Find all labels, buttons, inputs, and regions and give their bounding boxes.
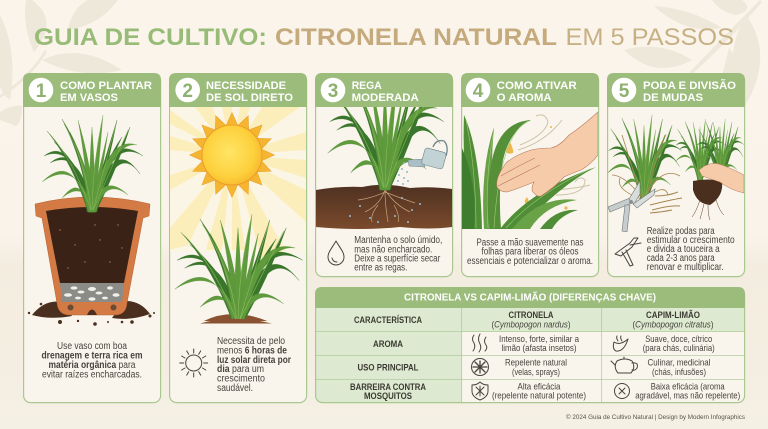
row: barreira contra mosquitos: (repelente natural potente): [492, 391, 586, 401]
table title: [315, 287, 745, 308]
header: step 2: NECESSIDADE: [206, 80, 286, 92]
text: step 4 description: Passe a mão suavemente nas: [476, 237, 584, 248]
decorative leaves right: [624, 0, 762, 106]
row: uso principal: USO PRINCIPAL: [358, 362, 419, 372]
text: step 3 description: mas não encharcado.: [354, 244, 432, 255]
text: step 2 description: dia para um: [217, 364, 264, 375]
text: step 4 description: essenciais e potencializar o aroma.: [467, 256, 593, 267]
header: step 5: DE MUDAS: [643, 92, 703, 104]
row: barreira contra mosquitos: [350, 382, 740, 401]
row: barreira contra mosquitos: Alta eficácia: [518, 382, 561, 392]
decorative leaves left: [0, 0, 122, 126]
text: step 4 description: folhas para liberar os óleos: [482, 247, 579, 258]
row: uso principal: [358, 357, 710, 377]
row: aroma: Intenso, forte, similar a: [499, 334, 580, 344]
row: barreira contra mosquitos: agradável, mas não repelente): [635, 391, 740, 401]
header: step 1: [23, 73, 161, 107]
text: step 1 description: matéria orgânica para: [48, 360, 136, 371]
header: step 4: COMO ATIVAR: [497, 80, 577, 92]
panel: step 1 como plantar em vasos: [23, 73, 161, 403]
header: step 3: MODERADA: [352, 92, 419, 104]
header: step 4: 4: [473, 81, 484, 102]
title: GUIA DE CULTIVO:: [34, 24, 267, 51]
icon: x in circle: [614, 384, 630, 398]
table cell shading: [316, 308, 462, 403]
table column headers: CARACTERÍSTICA: [354, 315, 422, 325]
icon: shield mosquito: [472, 382, 488, 400]
pruning shears: [608, 181, 655, 232]
panel: step 5 poda e divisao de mudas: [607, 73, 745, 277]
header: step 2: [169, 73, 307, 107]
text: step 5 description: e divida a touceira a: [647, 244, 720, 255]
header: step 5: PODA E DIVISÃO: [643, 79, 736, 92]
text: step 5 description: [647, 226, 735, 273]
panel: step 3 rega moderada: [315, 72, 453, 277]
text: step 3 description: [354, 235, 442, 274]
icon: shears outline: [615, 238, 641, 266]
ground mound: [200, 319, 272, 324]
icon: teapot: [611, 357, 637, 373]
text: step 1 description: evitar raízes encharcadas.: [42, 370, 142, 380]
text: step 5 description: cada 2-3 anos para: [647, 253, 715, 264]
footer credit: © 2024 Guia de Cultivo Natural | Design by Modern Infographics: [566, 414, 745, 421]
text: step 3 description: entre as regas.: [354, 263, 407, 274]
illustration: potted plant: [28, 115, 155, 326]
row: uso principal: Culinar, medicinal: [648, 358, 710, 368]
row: aroma: AROMA: [373, 339, 403, 349]
header: step 3: REGA: [352, 80, 382, 92]
row: aroma: Suave, doce, cítrico: [645, 334, 712, 344]
text: step 2 description: saudável.: [217, 383, 253, 394]
text: step 1 description: drenagem e terra rica em: [42, 350, 143, 362]
title: [34, 24, 734, 51]
header: step 3: [315, 73, 453, 107]
header: step 4: O AROMA: [497, 92, 552, 104]
title: EM 5 PASSOS: [566, 24, 734, 51]
text: step 1 description: Use vaso com boa: [57, 341, 128, 352]
row: barreira contra mosquitos: MOSQUITOS: [364, 391, 412, 401]
text: step 5 description: estimular o crescimento: [647, 235, 735, 246]
table column headers: [354, 310, 714, 330]
row: uso principal: (velas, sprays): [512, 367, 560, 377]
icon: aroma waves: [472, 334, 487, 352]
icon: water drop: [328, 241, 344, 265]
text: step 5 description: renovar e multiplicar.: [647, 262, 724, 273]
header: step 5: 5: [619, 81, 630, 102]
icon: watering can: [397, 141, 447, 185]
panel: comparison table: [315, 287, 745, 403]
row: uso principal: Repelente natural: [505, 358, 567, 368]
row: aroma: limão (afasta insetos): [502, 343, 576, 353]
text: step 2 description: luz solar direta por: [217, 355, 291, 366]
text: step 5 description: Realize podas para: [647, 226, 715, 237]
text: step 2 description: crescimento: [217, 374, 265, 385]
icon: mosquito in circle: [472, 358, 488, 376]
row: barreira contra mosquitos: BARREIRA CONTRA: [350, 382, 426, 392]
text: step 2 description: [217, 336, 291, 394]
header: step 2: DE SOL DIRETO: [206, 92, 293, 104]
table title: CITRONELA VS CAPIM-LIMÃO (DIFERENÇAS CHAVE): [404, 290, 656, 304]
header: step 3: 3: [328, 81, 338, 102]
table column headers: (Cymbopogon citratus): [632, 320, 714, 330]
table column headers: CAPIM-LIMÃO: [646, 310, 700, 320]
illustration: watered plant: [316, 107, 452, 229]
row: uso principal: (chás, infusões): [652, 367, 706, 377]
header: step 4: [461, 73, 599, 107]
illustration: sun and plant: [170, 95, 306, 324]
table column headers: CITRONELA: [508, 310, 554, 320]
icon: spoon and steam: [613, 336, 628, 351]
header: step 2: 2: [182, 81, 193, 102]
panel: step 2 necessidade de sol direto: [169, 73, 307, 403]
text: step 2 description: Necessita de pelo: [217, 336, 285, 347]
text: step 3 description: Mantenha o solo úmido,: [354, 235, 442, 246]
row: aroma: [373, 334, 715, 353]
row: barreira contra mosquitos: Baixa eficácia (aroma: [651, 382, 725, 392]
title: CITRONELA NATURAL: [275, 24, 557, 51]
illustration: pruning and division: [607, 115, 744, 232]
header: step 1: EM VASOS: [60, 92, 118, 104]
header: step 1: 1: [36, 81, 47, 102]
table column headers: (Cymbopogon nardus): [492, 320, 570, 330]
header: step 5: [607, 73, 745, 107]
text: step 2 description: menos 6 horas de: [217, 345, 288, 356]
header: step 1: COMO PLANTAR: [60, 80, 152, 92]
text: step 1 description: [42, 341, 143, 380]
illustration: hand on leaves: [462, 112, 598, 229]
panel: step 4 como ativar o aroma: [461, 73, 599, 277]
text: step 3 description: Deixe a superfície secar: [354, 254, 441, 265]
icon: sun outline: [180, 349, 208, 377]
row: aroma: (para chás, culinária): [643, 343, 715, 353]
text: step 4 description: [467, 237, 593, 267]
